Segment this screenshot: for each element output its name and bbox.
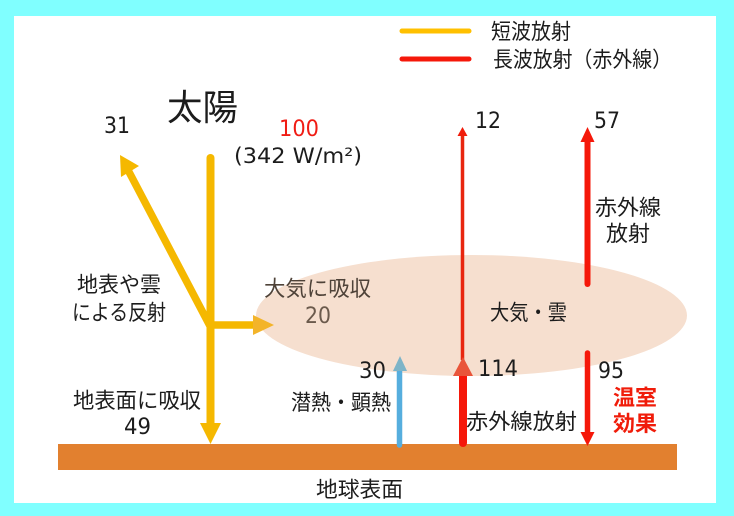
label: latent and sensible heat: 潜熱・顕熱	[291, 386, 391, 417]
arrow: surface infrared emission	[453, 357, 473, 443]
incoming value 100: 100	[279, 117, 319, 142]
legend: 長波放射（赤外線）	[493, 43, 672, 74]
value 30: 30	[359, 359, 386, 384]
value 114: 114	[478, 357, 518, 382]
title: sun: 太陽	[167, 79, 238, 131]
reflected value 31: 31	[104, 114, 130, 139]
atmosphere and clouds ellipse	[256, 255, 687, 376]
label: absorbed by surface	[73, 384, 201, 440]
arrow: absorbed by atmosphere	[208, 315, 274, 335]
label: earth surface: 地球表面	[316, 473, 403, 504]
label: absorbed by atmosphere: 20	[305, 304, 331, 329]
ground bar: earth surface	[58, 444, 677, 470]
label: absorbed by atmosphere	[264, 272, 371, 329]
arrow: atmospheric infrared to space	[580, 127, 594, 284]
label: reflected by surface and clouds	[72, 268, 166, 327]
value 12: 12	[475, 109, 501, 134]
label: absorbed by atmosphere: 大気に吸収	[264, 272, 371, 303]
label: greenhouse effect	[613, 381, 657, 438]
arrow: latent and sensible heat	[393, 356, 407, 445]
arrow: back radiation	[580, 353, 594, 446]
label: absorbed by surface: 49	[124, 415, 151, 440]
incoming flux: (342 W/m²)	[234, 144, 362, 168]
label: infrared emission to space: 放射	[606, 217, 650, 248]
label: greenhouse effect: 効果	[613, 407, 657, 438]
value 57: 57	[594, 109, 620, 134]
label: infrared emission to space: 赤外線	[595, 191, 661, 222]
legend: 短波放射	[491, 15, 571, 46]
label: reflected by surface and clouds: による反射	[72, 296, 166, 327]
label: infrared emission to space	[595, 191, 661, 248]
label: atmosphere and clouds: 大気・雲	[490, 296, 567, 327]
label: greenhouse effect: 温室	[613, 381, 657, 412]
arrow: incoming and absorbed by surface	[200, 158, 221, 444]
label: infrared emission: 赤外線放射	[466, 405, 577, 436]
legend	[402, 15, 672, 74]
label: absorbed by surface: 地表面に吸収	[73, 384, 201, 415]
arrow: reflected	[120, 155, 210, 326]
arrow: infrared through atmosphere 12	[458, 127, 468, 360]
value 95: 95	[598, 359, 624, 384]
label: reflected by surface and clouds: 地表や雲	[77, 268, 161, 299]
